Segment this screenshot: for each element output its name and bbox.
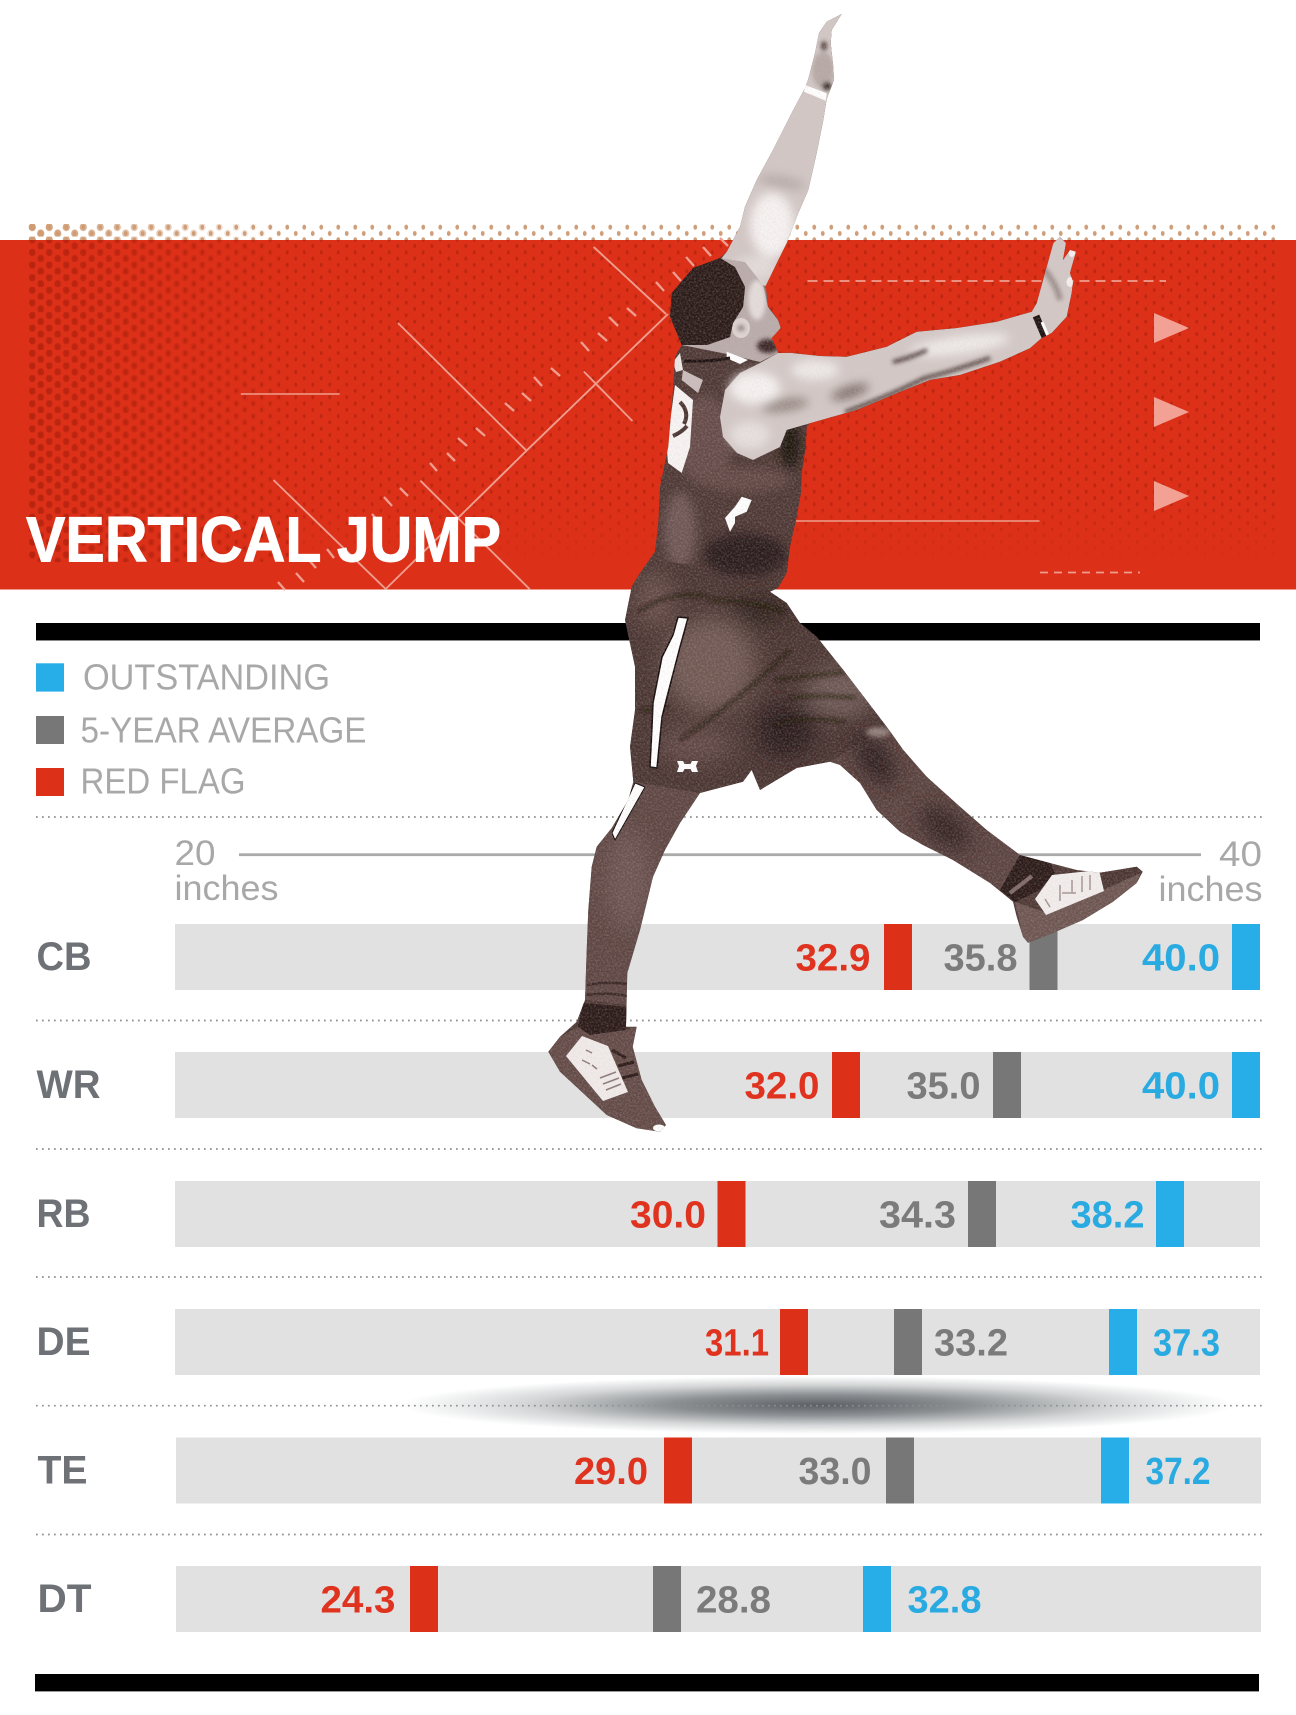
sock [578, 1003, 627, 1035]
arrow triangles [1154, 313, 1189, 511]
red flag marker [664, 1438, 692, 1504]
axis scale [174, 833, 1262, 909]
position label: CB [36, 935, 92, 979]
outstanding value: 38.2 [1070, 1194, 1144, 1236]
wristband [804, 85, 827, 101]
average marker [886, 1438, 914, 1504]
shorts fold lines [638, 595, 855, 740]
halftone pattern on banner [28, 240, 1280, 564]
sock bands [587, 983, 627, 996]
shoe laces [612, 1050, 638, 1078]
red flag value: 31.1 [705, 1322, 769, 1364]
track [175, 1181, 1260, 1247]
halftone strip above banner [28, 224, 1277, 240]
outstanding marker [1101, 1438, 1129, 1504]
athlete jumping figure [540, 10, 1150, 1140]
neck tag [682, 370, 703, 393]
axis end unit: inches [1158, 869, 1262, 909]
arrow 3 [1154, 481, 1189, 511]
track [176, 1566, 1261, 1632]
side stripe [650, 617, 688, 768]
position label: RB [36, 1192, 90, 1236]
leg stripe [612, 783, 645, 840]
waist logo [725, 497, 752, 532]
red flag marker [718, 1181, 746, 1247]
bottom black rule [35, 1674, 1259, 1692]
red flag value: 24.3 [320, 1580, 396, 1622]
track [176, 1438, 1261, 1504]
outstanding value: 40.0 [1142, 1066, 1220, 1108]
trailing leg [830, 727, 1143, 943]
upper arm [722, 14, 842, 286]
axis start unit: inches [174, 868, 278, 908]
wrist bracelet [1036, 316, 1048, 337]
red banner background [0, 240, 1296, 590]
legend [36, 656, 366, 802]
red flag marker [832, 1052, 860, 1118]
track [175, 1309, 1260, 1375]
top black rule [36, 623, 1260, 641]
collar white [727, 352, 748, 364]
shoe upper [566, 1036, 628, 1101]
chart: position rows [36, 924, 1261, 1632]
knee highlight [866, 727, 890, 737]
position label: DE [36, 1320, 90, 1364]
average value: 33.2 [934, 1322, 1008, 1364]
ear [732, 318, 750, 338]
sock strap [1010, 876, 1032, 893]
shoulder and extended arm [720, 237, 1076, 460]
sock [1000, 855, 1055, 902]
red flag marker [884, 924, 912, 990]
track [175, 924, 1260, 990]
panel: header banner [0, 224, 1296, 590]
outstanding value: 40.0 [1142, 938, 1220, 980]
leading leg [548, 782, 700, 1132]
position label: DT [38, 1577, 92, 1621]
red flag marker [410, 1566, 438, 1632]
average value: 34.3 [879, 1194, 956, 1236]
average value: 35.0 [906, 1066, 980, 1108]
arrow 2 [1154, 397, 1189, 427]
legend: red flag label: RED FLAG [80, 761, 246, 802]
title: VERTICAL JUMP [26, 504, 501, 576]
outstanding marker [1232, 1052, 1260, 1118]
outstanding value: 32.8 [908, 1580, 982, 1622]
shorts [625, 560, 887, 793]
row: DT [38, 1566, 1261, 1632]
shoe sole [1015, 870, 1142, 943]
red flag value: 32.0 [744, 1066, 820, 1108]
average marker [993, 1052, 1021, 1118]
average value: 35.8 [944, 938, 1018, 980]
row: RB [36, 1181, 1260, 1247]
legend: red flag swatch [36, 768, 64, 796]
arrow 1 [1154, 313, 1189, 343]
shoe upper [1035, 870, 1104, 915]
face [682, 258, 781, 362]
legend: average label: 5-YEAR AVERAGE [80, 710, 366, 751]
jersey details [667, 352, 752, 532]
legend: outstanding label: OUTSTANDING [83, 656, 330, 698]
red flag marker [780, 1309, 808, 1375]
position label: TE [38, 1448, 88, 1492]
row: DE [36, 1309, 1260, 1375]
track [175, 1052, 1260, 1118]
row: WR [36, 1052, 1260, 1118]
red flag value: 30.0 [630, 1194, 706, 1236]
jersey number [667, 385, 693, 473]
average marker [894, 1309, 922, 1375]
shoe [548, 1027, 666, 1132]
football field lines [241, 238, 1166, 590]
shoe toe tip [653, 1124, 665, 1132]
outstanding value: 37.3 [1153, 1322, 1220, 1364]
average value: 33.0 [798, 1451, 872, 1493]
jersey tones [664, 395, 800, 577]
outstanding marker [1109, 1309, 1137, 1375]
row: CB [36, 924, 1260, 990]
shoe toe [1098, 866, 1143, 890]
collar dark [684, 358, 730, 361]
ground shadow [400, 1376, 1236, 1434]
outstanding value: 37.2 [1146, 1451, 1210, 1493]
average value: 28.8 [696, 1580, 771, 1622]
legend: outstanding swatch [36, 663, 64, 692]
head [670, 258, 781, 362]
average marker [653, 1566, 681, 1632]
red flag value: 29.0 [574, 1451, 648, 1493]
position label: WR [36, 1063, 101, 1107]
axis start label: 20 [174, 833, 216, 873]
axis end label: 40 [1219, 834, 1262, 874]
film grain texture [540, 10, 1150, 1140]
hair [670, 258, 745, 345]
average marker [968, 1181, 996, 1247]
red flag value: 32.9 [796, 938, 870, 980]
outstanding marker [863, 1566, 891, 1632]
outstanding marker [1232, 924, 1260, 990]
finger highlights [1066, 247, 1076, 287]
legend: average swatch [36, 716, 64, 744]
row: TE [38, 1438, 1261, 1504]
base body tone [540, 10, 1150, 1140]
axis line [239, 853, 1201, 856]
brand logo [677, 761, 698, 772]
outstanding marker [1156, 1181, 1184, 1247]
average marker [1030, 924, 1058, 990]
